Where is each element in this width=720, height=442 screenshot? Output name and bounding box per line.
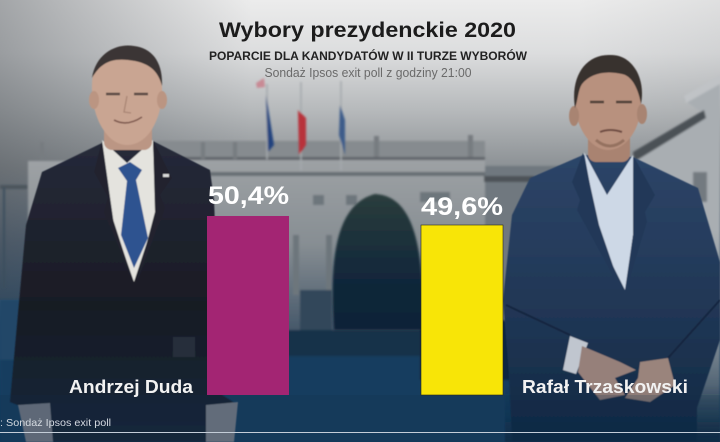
- head: [92, 52, 162, 145]
- note: Sondaż Ipsos exit poll z godziny 21:00: [264, 66, 472, 80]
- photo: Andrzej Duda: [10, 45, 238, 442]
- photo: Rafał Trzaskowski: [503, 55, 720, 442]
- value: Duda: 50,4%: [208, 182, 289, 210]
- face details: [590, 101, 632, 103]
- lapels: [572, 153, 622, 292]
- label: Andrzej Duda: Andrzej Duda: [69, 377, 194, 397]
- suit: [10, 141, 238, 442]
- source note: : Sondaż Ipsos exit poll: [0, 417, 111, 429]
- ears: [89, 91, 99, 109]
- suit: [503, 155, 720, 442]
- bar chart: [207, 182, 503, 395]
- lower fade over hands: [505, 385, 720, 442]
- head: [575, 62, 641, 150]
- right hand: [206, 402, 238, 442]
- hair: [92, 45, 162, 86]
- bottom fade: [0, 395, 720, 442]
- arm shadows: [506, 300, 720, 358]
- background: presidential palace: [0, 135, 720, 442]
- lapels: [94, 141, 134, 284]
- title: Wybory prezydenckie 2020: [219, 19, 516, 42]
- shirt: [584, 152, 633, 290]
- value: Trzaskowski: 49,6%: [421, 193, 503, 221]
- necktie: [118, 162, 148, 268]
- bar: Trzaskowski: [421, 225, 503, 395]
- pin: [163, 174, 169, 177]
- neck: [588, 130, 630, 162]
- background: tree: [333, 194, 423, 330]
- pocket: [173, 337, 195, 357]
- shirt: [102, 140, 156, 282]
- subtitle: POPARCIE DLA KANDYDATÓW W II TURZE WYBORÓW: [209, 50, 527, 63]
- neck: [104, 122, 152, 150]
- ears: [569, 106, 579, 126]
- left hand: [18, 403, 53, 442]
- cuff: [563, 336, 588, 374]
- background: right wing of palace: [630, 75, 720, 442]
- bar: Duda: [207, 216, 289, 395]
- face details: [106, 93, 148, 95]
- flags: [256, 78, 345, 170]
- label: Rafał Trzaskowski: Rafał Trzaskowski: [522, 377, 688, 397]
- windows and columns: [293, 192, 450, 330]
- footer rule: [0, 432, 720, 433]
- ground band: [0, 330, 505, 356]
- hair: [574, 55, 642, 108]
- hands: [578, 346, 636, 400]
